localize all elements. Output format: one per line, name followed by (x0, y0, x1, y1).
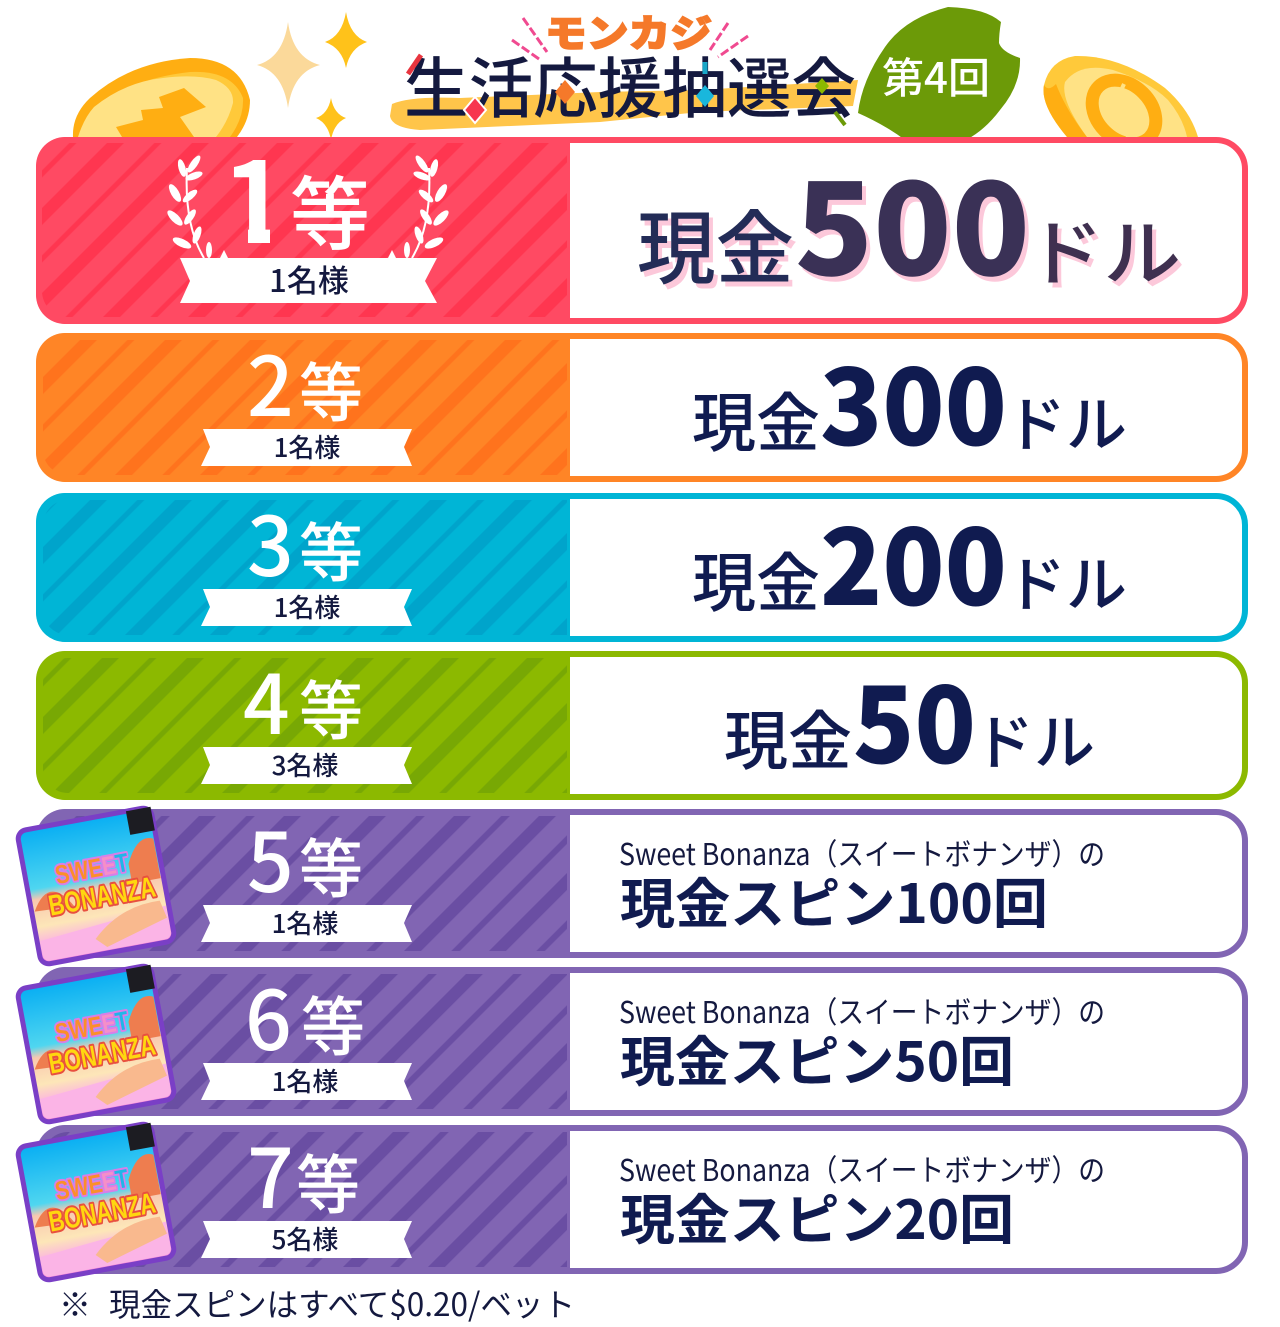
prize: 現金スピン50回 (620, 1018, 1014, 1097)
prize: 現金 (724, 691, 852, 783)
game thumbnail (17, 807, 175, 965)
ribbon (201, 429, 412, 466)
sparkle: lower gold (316, 98, 346, 140)
panel: 2等 (36, 321, 1245, 482)
rank label: 3 (247, 481, 294, 600)
rank label: 等 (299, 503, 363, 595)
prize note: Sweet Bonanza（スイートボナンザ）の (619, 988, 1105, 1032)
prize: 現金 (637, 185, 794, 301)
rank label: 等 (290, 151, 370, 267)
prize: 現金スピン100回 (620, 860, 1048, 939)
badge: 第4回 (858, 7, 1020, 140)
rank label: 5 (247, 797, 294, 916)
panel: 6等 (17, 955, 1245, 1123)
brush stroke (390, 80, 858, 130)
prize (637, 130, 1185, 317)
rank label: 等 (296, 1135, 360, 1227)
game thumbnail: SWEET (53, 1163, 131, 1206)
rank label: 等 (299, 819, 363, 911)
game thumbnail: SWEET (53, 1005, 131, 1048)
prize (692, 484, 1127, 635)
rank label (247, 797, 363, 916)
game thumbnail: BONANZA (46, 871, 158, 923)
prize: ドル (973, 695, 1095, 782)
ribbon (201, 589, 412, 626)
title accents (408, 55, 421, 74)
rank label: 等 (299, 343, 363, 435)
rank label (245, 955, 365, 1074)
ribbon (201, 1221, 412, 1258)
prize (724, 642, 1095, 793)
prize: ドル (1005, 377, 1127, 464)
prize note: Sweet Bonanza（スイートボナンザ）の (619, 830, 1105, 874)
winners: 1名様 (269, 256, 349, 301)
winners: 1名様 (272, 904, 338, 941)
rank label: 等 (299, 661, 363, 753)
title logo (390, 3, 858, 132)
rank label (247, 1113, 360, 1232)
laurel right (388, 154, 451, 258)
footnote: 現金スピンはすべて$0.20/ベット (109, 1280, 575, 1326)
prize: 500 (795, 130, 1030, 312)
prize: 現金 (692, 533, 820, 625)
rank label: 7 (247, 1113, 294, 1232)
sparkle: large pale (257, 22, 320, 108)
game thumbnail: SWEET (53, 847, 131, 890)
prize: 現金 (692, 373, 820, 465)
coin: right (1043, 56, 1198, 157)
winners: 5名様 (272, 1220, 338, 1257)
prize (692, 324, 1127, 475)
ribbon (201, 747, 412, 784)
sparkle: top gold (325, 12, 367, 68)
prize: 500 (799, 135, 1034, 317)
panel: 5等 (17, 797, 1245, 965)
panel: 7等 (17, 1113, 1245, 1281)
striped rank area (36, 137, 570, 324)
ribbon (201, 1063, 412, 1100)
game thumbnail: BONANZA (46, 1029, 158, 1081)
prize: 50 (853, 642, 976, 793)
rank label: 2 (247, 321, 294, 440)
prize: ドル (1026, 195, 1181, 300)
prize: 現金スピン20回 (620, 1176, 1014, 1255)
rank label (243, 639, 363, 758)
rank label: 4 (243, 639, 290, 758)
main title: 生活応援抽選会 (404, 36, 856, 132)
rank label (247, 321, 363, 440)
panel: 3等 (36, 481, 1245, 642)
prize note: Sweet Bonanza（スイートボナンザ）の (619, 1146, 1105, 1190)
game thumbnail (17, 965, 175, 1123)
ribbon (201, 905, 412, 942)
speed lines (512, 18, 748, 59)
prize: 200 (820, 484, 1007, 635)
rank label: 6 (245, 955, 292, 1074)
game thumbnail (17, 1123, 175, 1281)
panel: 1等 (36, 137, 1248, 324)
game thumbnail: BONANZA (46, 1187, 158, 1239)
prize: 現金 (641, 190, 798, 306)
prize: 300 (820, 324, 1007, 475)
badge: 第4回: 第4回 (882, 45, 990, 106)
brand name: モンカジ (545, 3, 712, 58)
rank label (234, 160, 367, 250)
footnote: ※ (59, 1280, 91, 1326)
frame (39, 140, 1245, 321)
title diamonds (464, 97, 486, 123)
prize: ドル (1005, 537, 1127, 624)
panel: 4等 (36, 639, 1245, 800)
laurel left (165, 154, 228, 258)
rank label: 等 (301, 977, 365, 1069)
ribbon (180, 258, 437, 303)
winners: 1名様 (272, 1062, 338, 1099)
prize: ドル (1030, 200, 1185, 305)
winners: 1名様 (274, 588, 340, 625)
rank label (247, 481, 363, 600)
coin: left (73, 58, 250, 137)
rank label: 1 (222, 114, 288, 276)
winners: 3名様 (272, 746, 338, 783)
winners: 1名様 (274, 428, 340, 465)
